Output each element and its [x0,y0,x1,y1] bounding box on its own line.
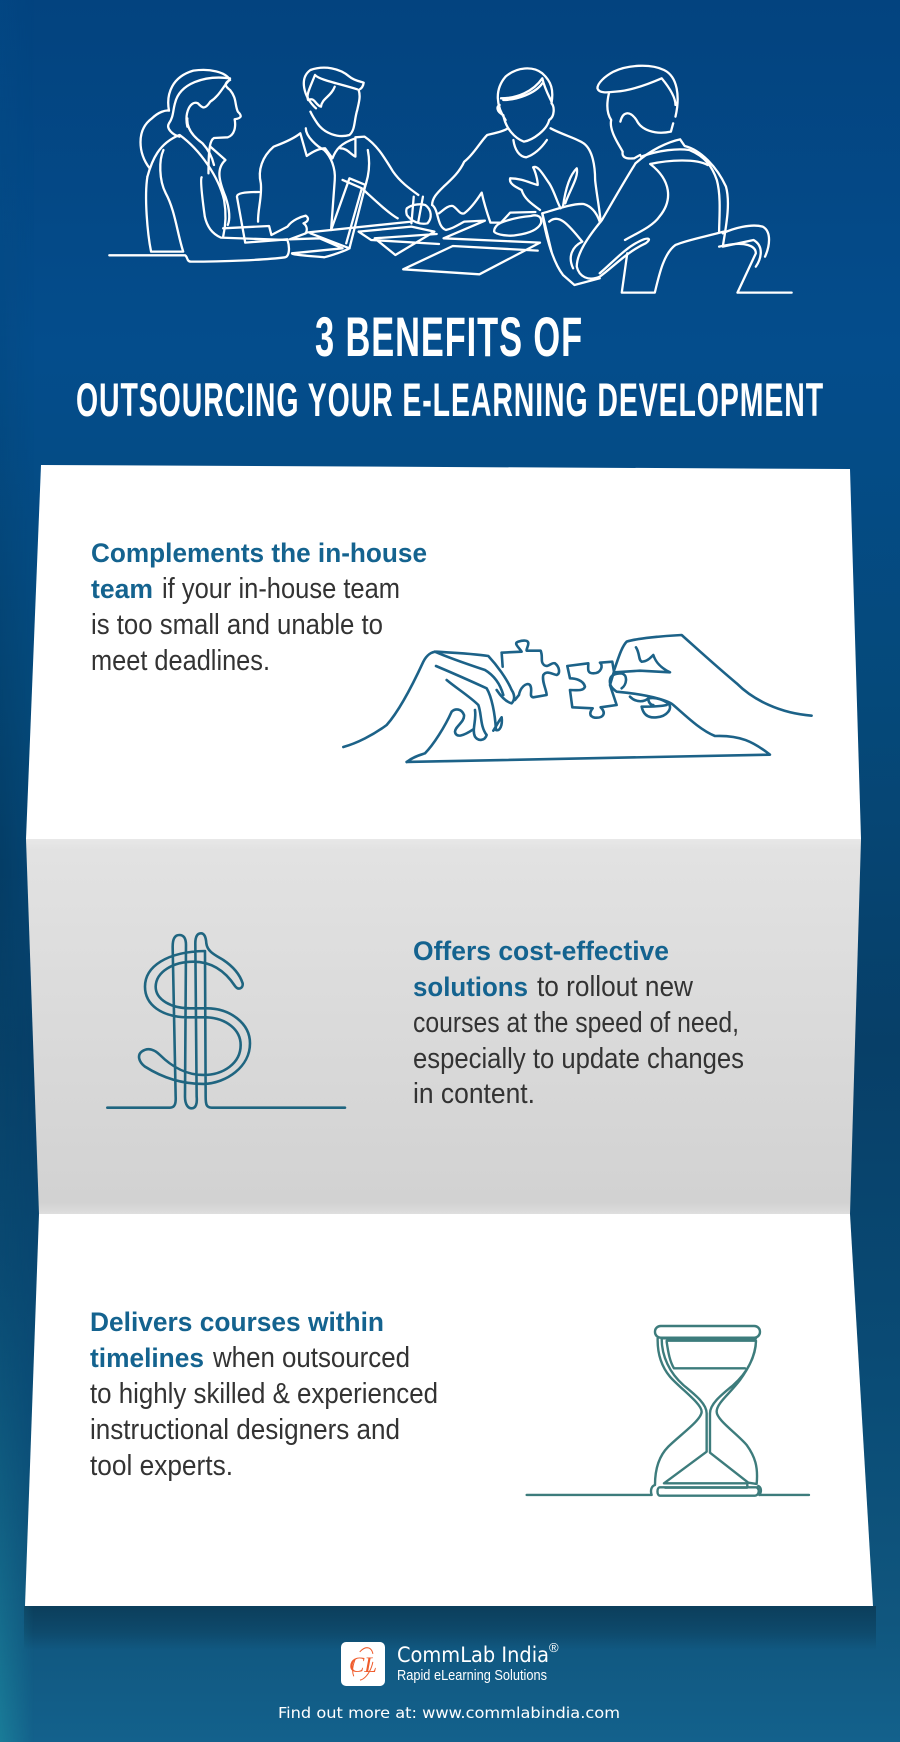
text: delivers courses within timelines: tool experts. [90,1450,233,1482]
text: cost-effective solutions: in content. [413,1078,535,1110]
text: cost-effective solutions: Offers cost-effective [413,936,669,966]
title [76,305,824,426]
registered mark: ® [549,1640,559,1655]
text: delivers courses within timelines: to highly skilled & experienced [90,1378,438,1410]
text: delivers courses within timelines: timelines [90,1343,204,1373]
text: cost-effective solutions: especially to update changes [413,1043,744,1075]
text: cost-effective solutions: to rollout new [537,971,694,1003]
footer: logo and link [278,1640,620,1722]
icon: hourglass [527,1326,809,1496]
text: delivers courses within timelines [90,1307,438,1482]
text: cost-effective solutions [413,936,744,1110]
panel: delivers courses within timelines [25,1214,873,1606]
text: delivers courses within timelines: Delivers courses within [90,1307,384,1337]
text: cost-effective solutions: solutions [413,972,528,1002]
brand name: CommLab India [397,1643,549,1667]
logo [341,1642,385,1686]
illustration: four colleagues meeting at a table [109,66,792,293]
text: complements the in-house team: Complements the in-house [91,538,427,568]
panel: complements the in-house team [26,465,861,839]
logo: CL [349,1652,377,1677]
figure: man across table [359,68,601,274]
tagline: Rapid eLearning Solutions [397,1668,547,1684]
text: cost-effective solutions: courses at the speed of need, [413,1007,739,1039]
text: delivers courses within timelines: when outsourced [212,1342,410,1374]
panel: cost-effective solutions [26,839,861,1214]
website link: Find out more at: www.commlabindia.com [278,1704,620,1722]
text: delivers courses within timelines: instructional designers and [90,1414,400,1446]
text: complements the in-house team: team [91,574,153,604]
text: complements the in-house team: if your in-house team [162,573,400,605]
figure: man in vest, back view [542,66,792,293]
icon: dollar sign [107,933,345,1108]
figure: woman [109,70,289,262]
title: 3 BENEFITS OF [315,305,583,368]
figure: man with laptop [223,68,418,257]
icon: hands joining puzzle pieces [343,635,812,762]
text: complements the in-house team: meet deadlines. [91,645,270,677]
text: complements the in-house team: is too small and unable to [91,609,383,641]
text: complements the in-house team [91,538,427,677]
